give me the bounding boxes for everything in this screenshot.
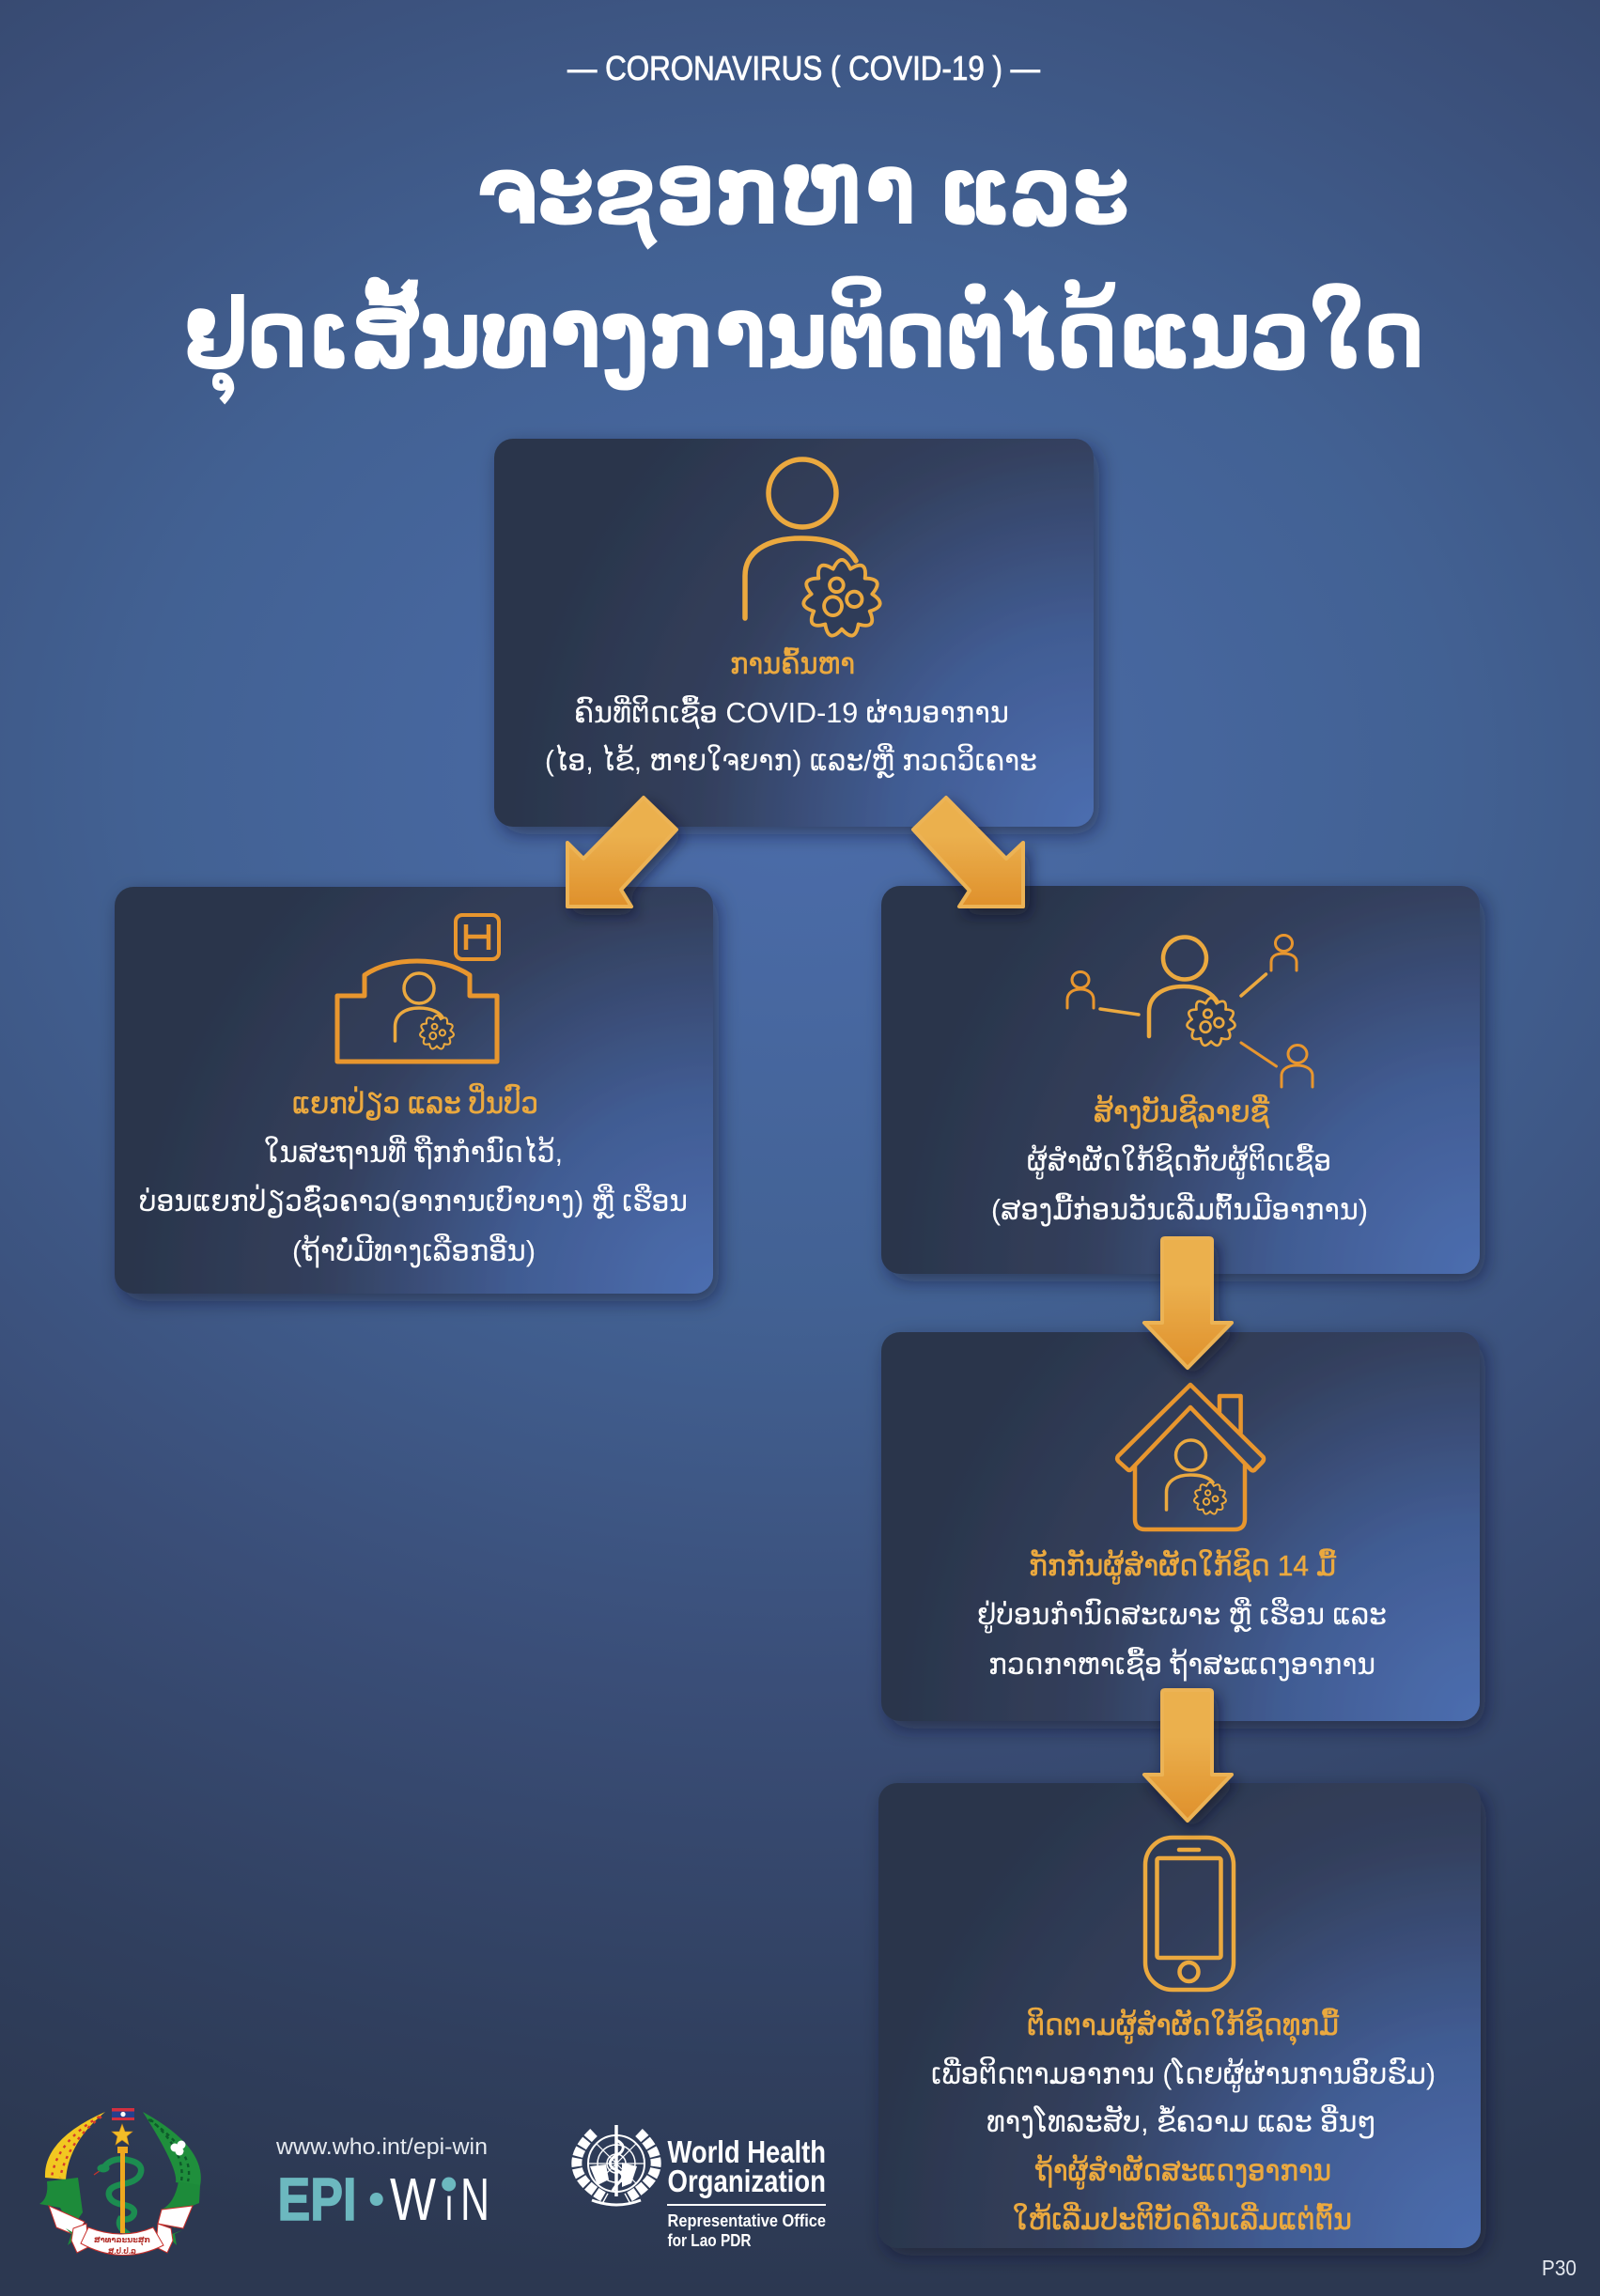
panel: list contacts — [881, 886, 1480, 1274]
WHO wordmark: World Health — [667, 2134, 826, 2169]
body text: ຢູ່ບ່ອນກຳນົດສະເພາະ ຫຼື ເຮືອນ ແລະ — [977, 1596, 1387, 1633]
body text: ບ່ອນແຍກປ່ຽວຊົ່ວຄາວ(ອາການເບົາບາງ) ຫຼື ເຮືອນ — [139, 1183, 688, 1218]
body text: (ໄອ, ໄຂ້, ຫາຍໃຈຍາກ) ແລະ/ຫຼື ກວດວິເຄາະ — [545, 742, 1037, 778]
icon: phone — [1145, 1838, 1234, 1990]
orange note — [1013, 2154, 1352, 2236]
url: www.who.int/epi-win — [275, 2134, 488, 2160]
body text: ຜູ້ສຳຜັດໃກ້ຊິດກັບຜູ້ຕິດເຊື້ອ — [1027, 1143, 1331, 1179]
body text — [977, 1596, 1387, 1681]
body text — [139, 1135, 688, 1267]
title — [184, 137, 1424, 405]
banner text: ສາທາລະນະສຸກ — [94, 2235, 150, 2246]
panel: isolate and treat — [115, 887, 713, 1294]
heading: ແຍກປ່ຽວ ແລະ ປິ່ນປົວ — [292, 1082, 538, 1120]
panel: search — [494, 439, 1094, 827]
arrow: to list contacts — [913, 798, 1023, 907]
body text: ເພື່ອຕິດຕາມອາການ (ໂດຍຜູ້ຜ່ານການອົບຮົມ) — [931, 2056, 1436, 2092]
body text: ໃນສະຖານທີ່ ຖືກກຳນົດໄວ້, — [264, 1135, 563, 1169]
body text — [931, 2056, 1436, 2138]
body text: (ສອງມື້ກ່ອນວັນເລີ່ມຕົ້ນມີອາການ) — [991, 1192, 1368, 1226]
orange note: ຖ້າຜູ້ສຳຜັດສະແດງອາການ — [1034, 2154, 1331, 2189]
body text: ທາງໂທລະສັບ, ຂໍ້ຄວາມ ແລະ ອື່ນໆ — [986, 2104, 1376, 2138]
logo: EPI-WIN: W — [390, 2165, 436, 2233]
arrow: to quarantine — [1144, 1238, 1232, 1368]
office text: Representative Office — [667, 2211, 826, 2230]
logo: EPI-WIN — [275, 2134, 489, 2233]
heading: ຕິດຕາມຜູ້ສຳຜັດໃກ້ຊິດທຸກມື້ — [1027, 2008, 1339, 2045]
body text: (ຖ້າບໍ່ມີທາງເລືອກອື່ນ) — [292, 1233, 536, 1267]
title: ຈະຊອກຫາ ແລະ — [476, 137, 1129, 250]
logo: EPI-WIN: i — [445, 2180, 453, 2230]
logo: World Health Organization: Organization — [667, 2164, 826, 2198]
WHO emblem — [577, 2125, 656, 2205]
logo: EPI-WIN: N — [460, 2165, 489, 2233]
panel: follow up contacts — [878, 1783, 1481, 2248]
icon: house — [1117, 1385, 1264, 1529]
banner text — [94, 2235, 150, 2256]
arrow: to follow up — [1144, 1690, 1232, 1821]
kicker: coronavirus: — CORONAVIRUS ( COVID-19 ) — — [567, 49, 1040, 87]
page code: P30 — [1542, 2256, 1577, 2280]
logo: World Health Organization — [577, 2125, 826, 2250]
icon: infected person — [745, 459, 880, 636]
body text: ກວດກາຫາເຊື້ອ ຖ້າສະແດງອາການ — [988, 1647, 1375, 1681]
logo: Lao Ministry of Health emblem — [39, 2108, 201, 2256]
banner text: ສ.ປ.ປ.ລ — [108, 2246, 136, 2256]
icon: contact network — [1067, 936, 1313, 1087]
panel: quarantine contacts — [881, 1332, 1480, 1721]
heading: ສ້າງບັນຊີລາຍຊື່ — [1094, 1094, 1270, 1128]
logo: World Health Organization: for Lao PDR — [667, 2231, 752, 2250]
orange note: ໃຫ້ເລີ່ມປະຕິບັດຄືນເລີ່ມແຕ່ຕົ້ນ — [1013, 2202, 1352, 2236]
arrow: to isolate — [567, 798, 676, 907]
heading: ກັກກັນຜູ້ສຳຜັດໃກ້ຊິດ 14 ມື້ — [1029, 1548, 1336, 1584]
body text — [991, 1143, 1368, 1226]
body text: ຄົນທີ່ຕິດເຊື້ອ COVID-19 ຜ່ານອາການ — [574, 695, 1009, 729]
logo: EPI-WIN: EPI — [278, 2165, 357, 2233]
body text — [545, 695, 1037, 778]
icon: hospital — [337, 915, 499, 1062]
heading: ການຄົ້ນຫາ — [730, 647, 855, 680]
title: ຢຸດເສັ້ນທາງການຕິດຕໍ່ໄດ້ແນວໃດ — [184, 276, 1424, 405]
